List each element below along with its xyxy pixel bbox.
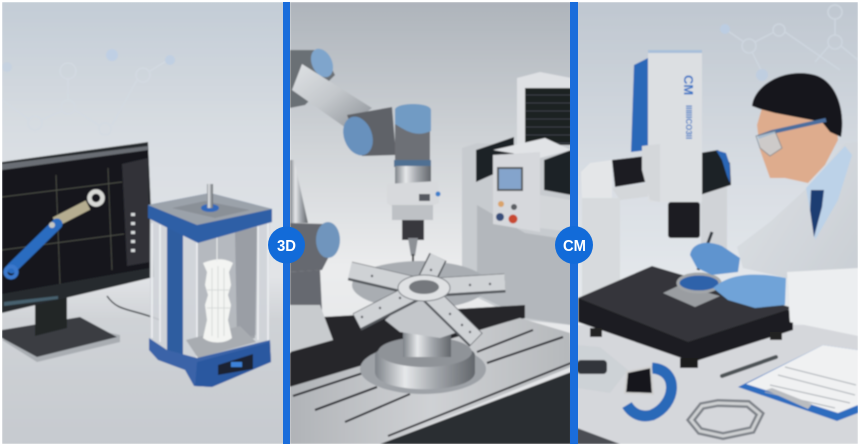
panel: CMM inspection: [577, 2, 858, 444]
CMM machine: [581, 50, 731, 310]
marker pen: [722, 357, 776, 376]
left divider with 3D badge: [268, 2, 305, 444]
smartwatch: [625, 367, 672, 416]
parts tray: [578, 358, 608, 376]
octagonal metal ring: [691, 403, 760, 436]
panel: robotic machining: [290, 2, 571, 444]
right divider with CM badge: [555, 2, 593, 444]
table with T-slots: [290, 305, 571, 444]
machine tool at right: [462, 72, 571, 325]
cable: [107, 296, 160, 320]
fixture pedestal: [360, 332, 486, 394]
gloved hands and stylus: [690, 232, 786, 308]
right divider with CM badge: CM: [563, 238, 586, 255]
panel: 3D design and printing: [2, 2, 284, 444]
small fixture on base: [663, 274, 720, 307]
monitor: [2, 142, 154, 362]
column label: CM: [681, 75, 696, 95]
3D printer: [148, 184, 272, 387]
robot arm: [290, 45, 440, 352]
clipboard with report: [738, 345, 858, 421]
granite base: [578, 266, 793, 368]
scientist: [737, 73, 858, 336]
star-shaped workpiece: [350, 257, 505, 340]
wrench on screen: [6, 192, 102, 278]
left divider with 3D badge: 3D: [277, 238, 296, 255]
CMM machine: IIIIIICO3II: [684, 105, 693, 139]
desk: [577, 325, 858, 444]
